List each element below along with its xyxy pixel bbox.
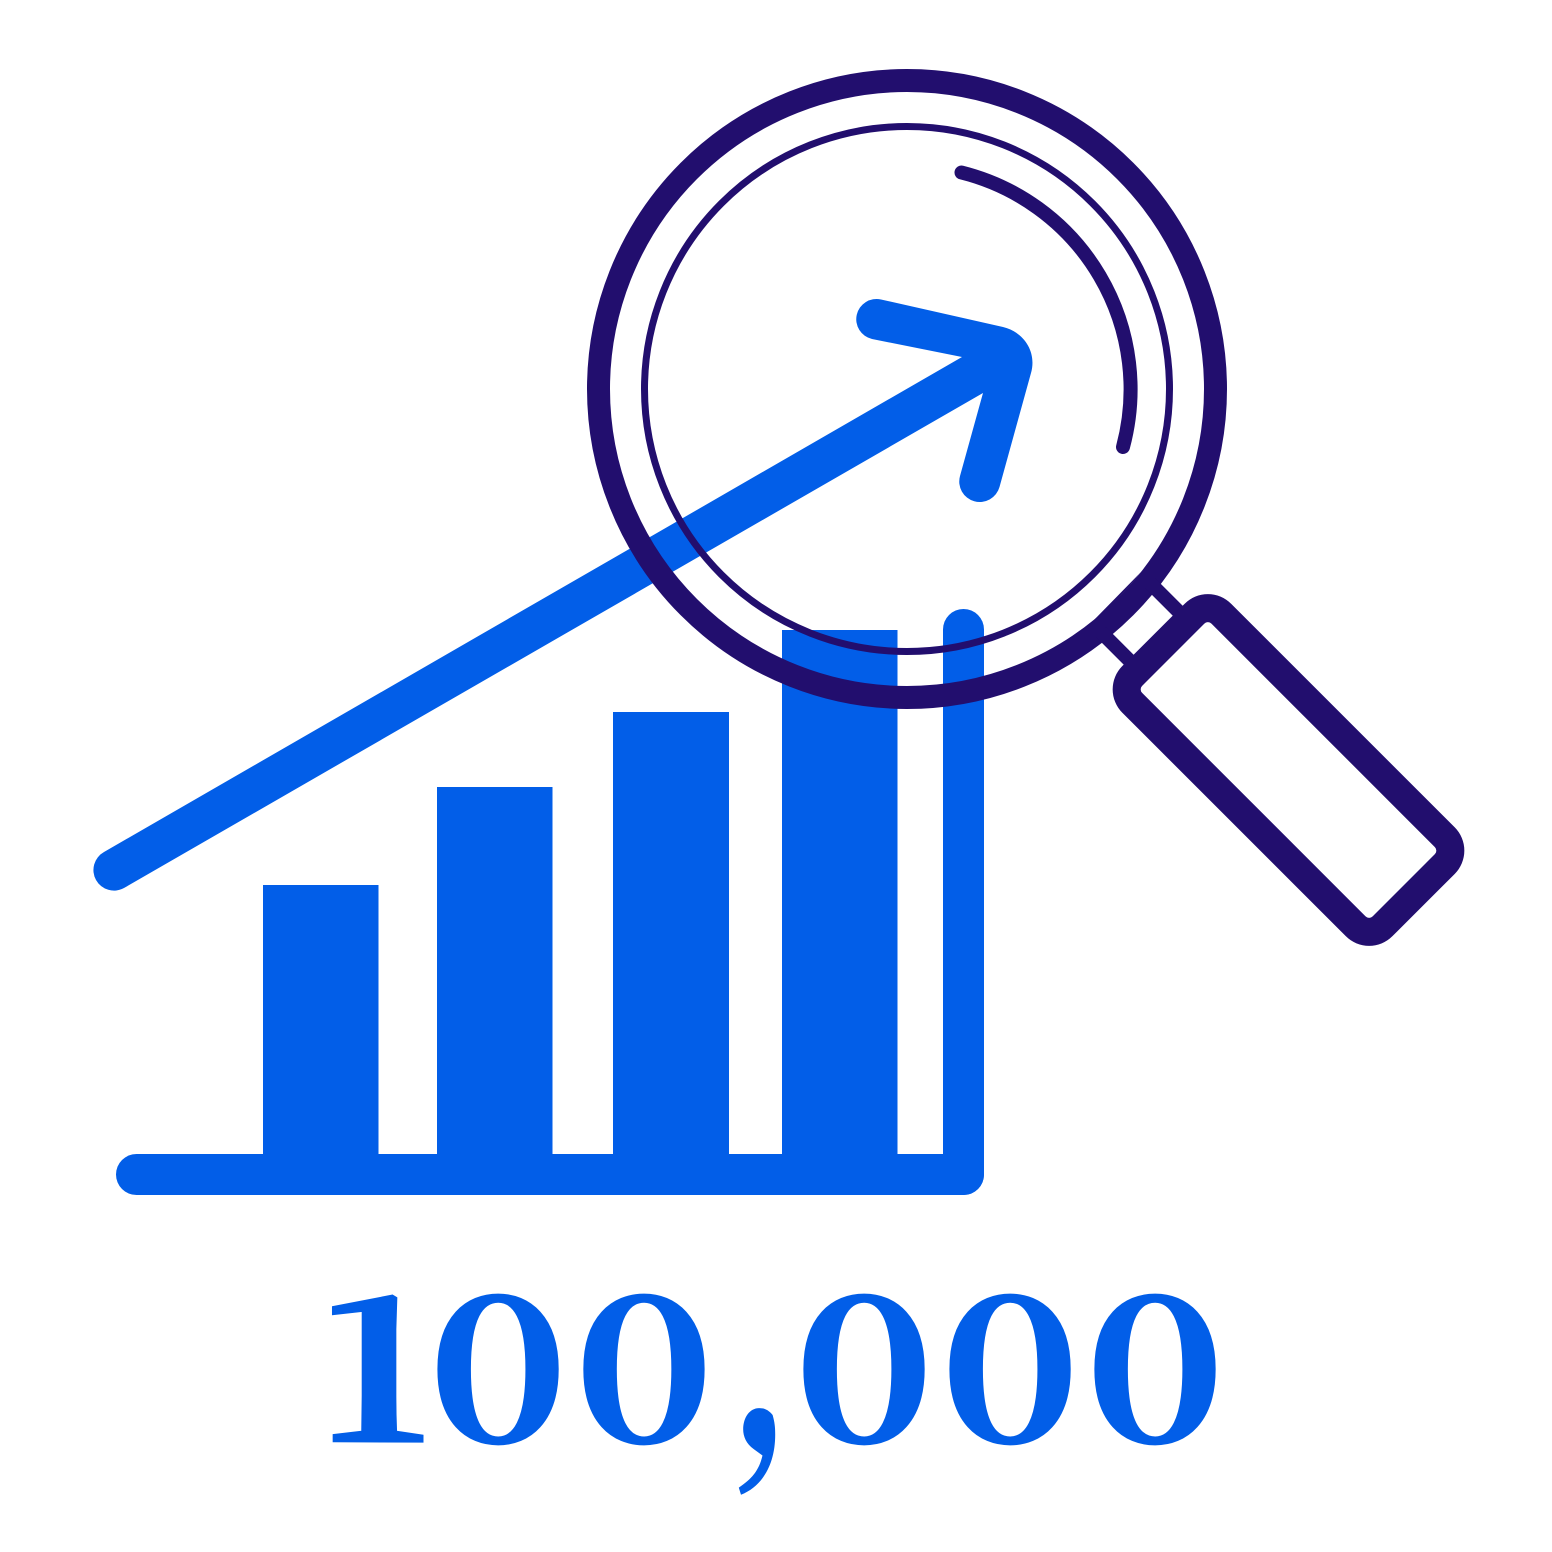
vertical rounded bar (943, 609, 984, 1195)
handle outer body (1099, 580, 1478, 960)
digits after comma: 000 (795, 1220, 1224, 1497)
digits before comma: 100 (321, 1220, 713, 1497)
handle neck (1101, 583, 1190, 672)
bar 3 (613, 712, 729, 1175)
bar 2 (437, 787, 552, 1175)
lens outer ring (598, 80, 1216, 698)
bar 1 (263, 885, 378, 1175)
lens inner ring (644, 126, 1170, 652)
bar 4 (782, 630, 898, 1175)
magnifying glass (598, 80, 1478, 960)
handle (1099, 580, 1478, 960)
handle inner cutout (1139, 620, 1438, 920)
big number (321, 1141, 1224, 1522)
baseline (116, 1154, 984, 1195)
bar chart (116, 609, 984, 1195)
lens collar segment (1093, 572, 1141, 621)
upward trend arrow (93, 299, 1032, 891)
lens highlight arc (962, 172, 1131, 447)
comma: , (726, 1141, 792, 1522)
